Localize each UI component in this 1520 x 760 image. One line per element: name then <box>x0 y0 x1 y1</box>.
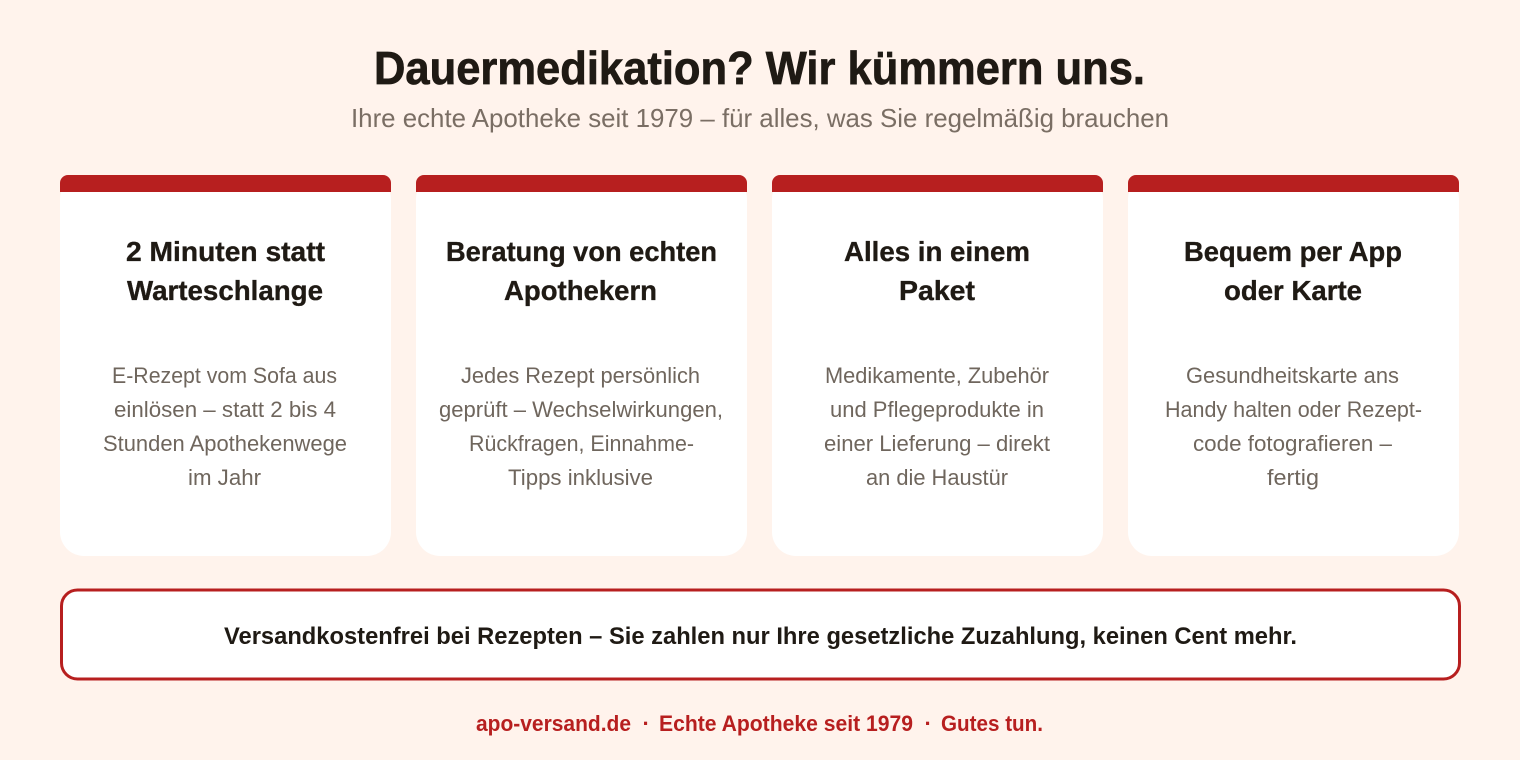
card text <box>103 363 347 490</box>
card heading <box>446 236 717 306</box>
card text <box>1165 363 1422 490</box>
card heading <box>126 236 325 306</box>
callout: shipping: Versandkostenfrei bei Rezepten – Sie zahlen nur Ihre gesetzliche Zuzahlung, keinen Cent mehr. <box>224 623 1297 650</box>
card text <box>824 363 1050 490</box>
card text: Jedes Rezept persönlich <box>461 363 700 388</box>
card heading <box>1184 236 1402 306</box>
footer: apo-versand.de <box>476 711 631 736</box>
card text: Gesundheitskarte ans <box>1186 363 1399 388</box>
card text <box>439 363 723 490</box>
card heading: 2 Minuten statt <box>126 236 325 267</box>
card text: Rückfragen, Einnahme- <box>469 431 694 456</box>
panel: Bequem per App oder Karte <box>1128 175 1459 556</box>
card text: code fotografieren – <box>1193 431 1393 456</box>
card text: an die Haustür <box>866 465 1008 490</box>
subtitle: Ihre echte Apotheke seit 1979 – für alles, was Sie regelmäßig brauchen <box>351 103 1169 133</box>
card text: geprüft – Wechselwirkungen, <box>439 397 723 422</box>
card text: im Jahr <box>188 465 261 490</box>
card text: Medikamente, Zubehör <box>825 363 1049 388</box>
card text: Stunden Apothekenwege <box>103 431 347 456</box>
callout: shipping <box>62 590 1460 679</box>
title: Dauermedikation? Wir kümmern uns. <box>374 42 1145 94</box>
card text: Handy halten oder Rezept- <box>1165 397 1422 422</box>
card heading: Bequem per App <box>1184 236 1402 267</box>
card heading: oder Karte <box>1224 275 1362 306</box>
card heading <box>844 236 1030 306</box>
footer: Gutes tun. <box>941 711 1043 736</box>
panel: Alles in einem Paket <box>772 175 1103 556</box>
card heading: Beratung von echten <box>446 236 717 267</box>
card text: Tipps inklusive <box>508 465 653 490</box>
card text: einer Lieferung – direkt <box>824 431 1050 456</box>
panel: 2 Minuten statt Warteschlange <box>60 175 391 556</box>
footer <box>476 711 1043 736</box>
card text: einlösen – statt 2 bis 4 <box>114 397 336 422</box>
card heading: Alles in einem <box>844 236 1030 267</box>
card text: und Pflegeprodukte in <box>830 397 1044 422</box>
footer: Echte Apotheke seit 1979 <box>659 711 913 736</box>
card heading: Warteschlange <box>127 275 323 306</box>
panel: Beratung von echten Apothekern <box>416 175 747 556</box>
footer: · <box>924 711 932 736</box>
card text: E-Rezept vom Sofa aus <box>112 363 337 388</box>
card heading: Paket <box>899 275 975 306</box>
card text: fertig <box>1267 465 1319 490</box>
card heading: Apothekern <box>504 275 657 306</box>
footer: · <box>642 711 650 736</box>
